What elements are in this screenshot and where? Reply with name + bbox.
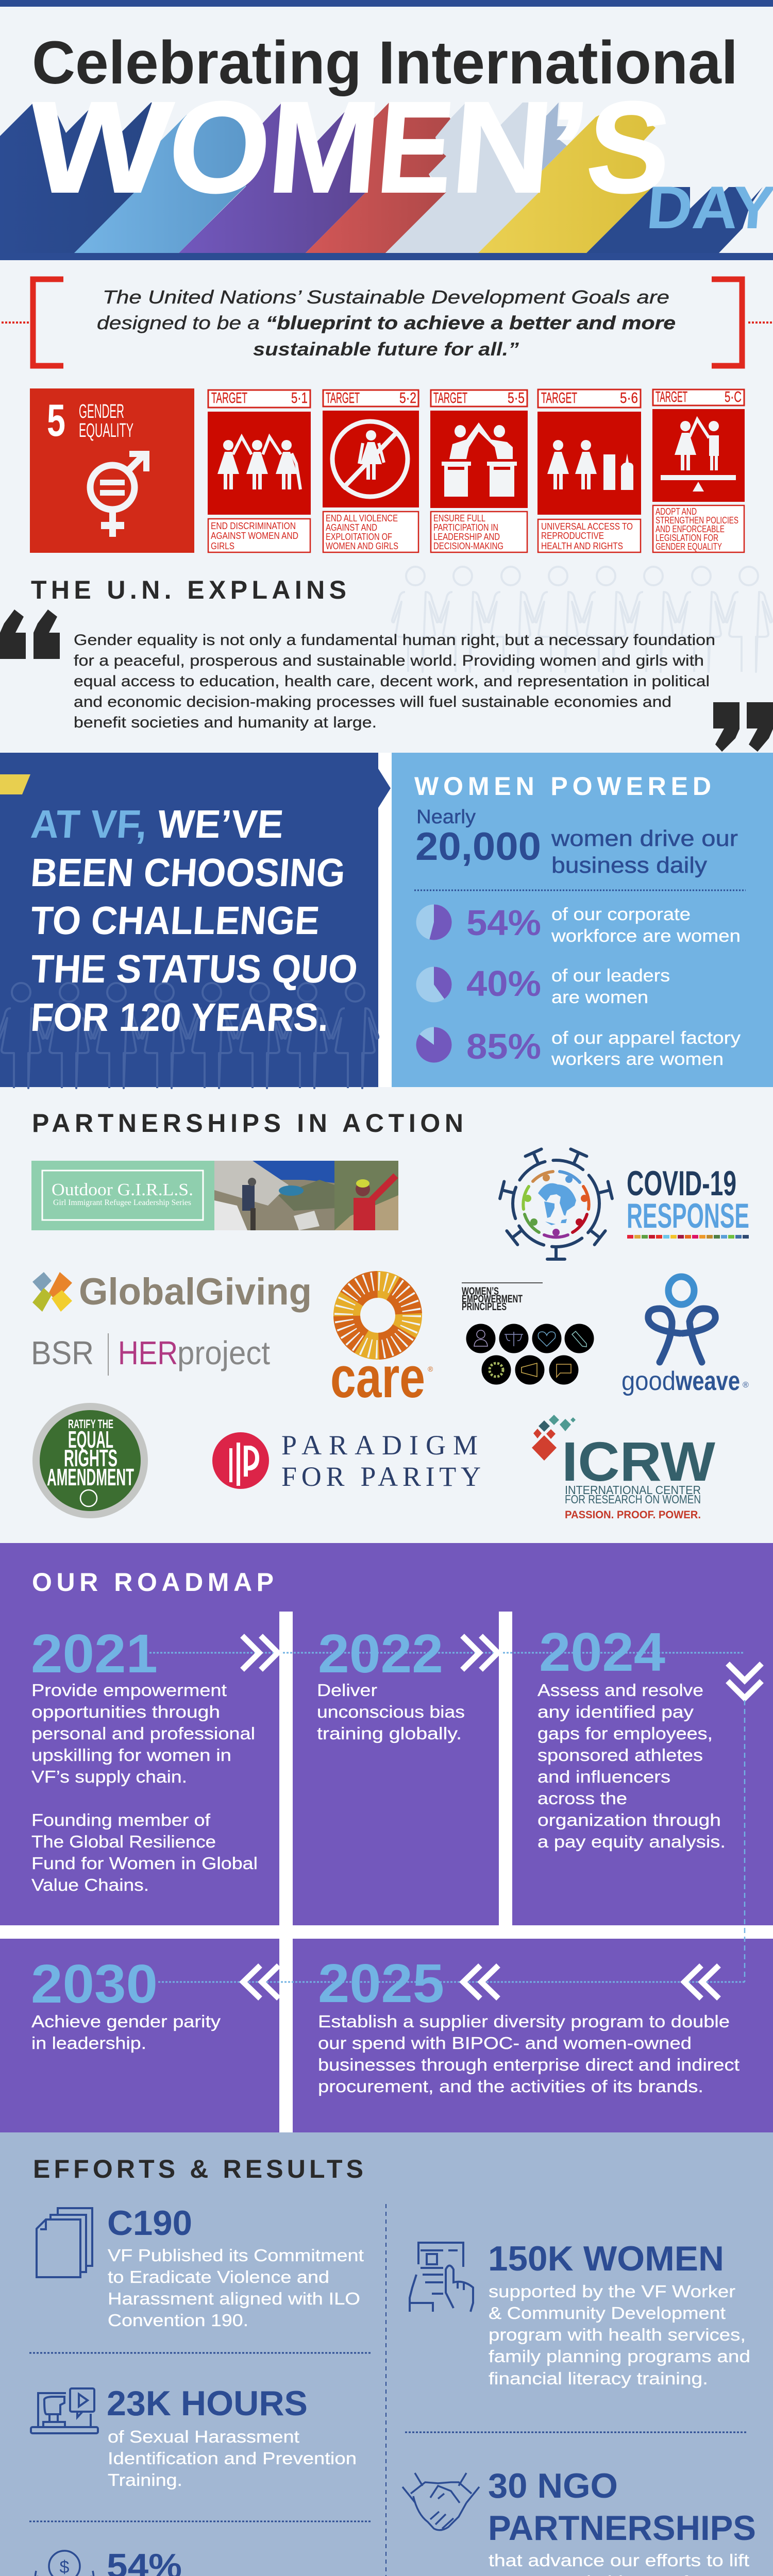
target 5.2 card: 5·2 bbox=[399, 390, 416, 406]
item: 150K women: 150K WOMEN bbox=[488, 2239, 724, 2278]
panel: women powered bbox=[392, 753, 773, 1087]
logo: ICRW: ICRW bbox=[562, 1430, 715, 1493]
goal number: 5 bbox=[47, 395, 65, 446]
item: 150K women: supported by the VF Worker bbox=[489, 2282, 735, 2301]
item: 150K women: program with health services, bbox=[489, 2325, 746, 2344]
icon: diamonds bbox=[532, 1415, 576, 1461]
target 5.1 card: 5·1 bbox=[291, 390, 308, 406]
2024 milestone: any identified pay bbox=[537, 1702, 694, 1721]
arrow: chevrons toward 2030 bbox=[243, 1965, 279, 1998]
icon: women at podiums bbox=[442, 422, 517, 497]
logo: Outdoor GIRLS banner: Outdoor G.I.R.L.S. bbox=[52, 1180, 193, 1199]
icon: hands holding coin bbox=[35, 2551, 94, 2576]
white gap behind statement panels bbox=[0, 753, 773, 1087]
SDG colour strip bbox=[627, 1235, 749, 1239]
logo: Paradigm for Parity bbox=[212, 1430, 481, 1492]
WOMEN'S wordmark: ’ bbox=[541, 74, 595, 220]
virus ring bbox=[500, 1149, 612, 1259]
stat: 40% leaders: of our leaders bbox=[551, 966, 670, 986]
panel: at VF statement: THE STATUS QUO bbox=[29, 947, 359, 991]
icon: documents bbox=[37, 2208, 92, 2277]
target 5.1 card: END DISCRIMINATION bbox=[211, 521, 296, 531]
target 5.5 card: PARTICIPATION IN bbox=[433, 522, 498, 533]
stat: 54% corporate workforce: workforce are women bbox=[551, 926, 741, 946]
2024 milestone bbox=[537, 1622, 726, 1851]
dotted timeline bbox=[149, 1652, 745, 1654]
target 5.6 card: HEALTH AND RIGHTS bbox=[541, 541, 623, 551]
target 5.5 card: DECISION-MAKING bbox=[433, 541, 503, 551]
2021 milestone: Fund for Women in Global bbox=[31, 1854, 258, 1873]
2022 milestone: Deliver bbox=[317, 1681, 377, 1700]
2021 milestone: The Global Resilience bbox=[31, 1832, 216, 1851]
icon: ring of hands bbox=[335, 1273, 420, 1358]
2030 milestone: in leadership. bbox=[31, 2033, 146, 2053]
target 5.1 card: GIRLS bbox=[211, 541, 234, 551]
target 5.c card: 5·C bbox=[725, 389, 742, 405]
20,000 women stat: women drive our bbox=[551, 826, 738, 851]
panel: roadmap upper row bbox=[0, 1543, 773, 1925]
stat: 54% corporate workforce: of our corporate bbox=[551, 905, 691, 924]
logo: ICRW: PASSION. PROOF. POWER. bbox=[565, 1509, 701, 1521]
paragraph bbox=[74, 632, 715, 731]
WOMEN'S wordmark: O bbox=[163, 74, 276, 220]
item: C190: C190 bbox=[107, 2204, 192, 2243]
item: 30 NGO partnerships bbox=[402, 2466, 756, 2576]
stat: 54% corporate workforce bbox=[416, 903, 741, 946]
2021 milestone: personal and professional bbox=[31, 1724, 255, 1743]
target 5.c card: ADOPT AND bbox=[656, 506, 697, 517]
target 5.2 card bbox=[323, 390, 419, 552]
heading: WOMEN POWERED bbox=[414, 772, 711, 801]
2025 milestone: our spend with BIPOC- and women-owned bbox=[318, 2033, 692, 2053]
target 5.2 card: EXPLOITATION OF bbox=[326, 532, 392, 542]
item: 30 NGO partnerships: 30 NGO bbox=[488, 2466, 618, 2505]
20,000 women stat: 20,000 bbox=[415, 825, 541, 869]
target 5.2 card: AGAINST AND bbox=[326, 522, 377, 533]
WOMEN'S wordmark: M bbox=[263, 74, 385, 220]
stat: 85% apparel factory workers: workers are women bbox=[551, 1049, 724, 1069]
target 5.5 card: TARGET bbox=[433, 390, 467, 406]
yellow tab bbox=[0, 774, 30, 794]
target 5.6 card: UNIVERSAL ACCESS TO bbox=[541, 521, 633, 532]
2024 milestone: and influencers bbox=[537, 1767, 670, 1786]
stat: 85% apparel factory workers: 85% bbox=[466, 1026, 541, 1066]
2030 milestone bbox=[31, 1954, 221, 2053]
left bracket bbox=[33, 279, 63, 366]
white column dividers bbox=[279, 1612, 293, 1925]
arrow: chevrons 2022 to 2024 bbox=[462, 1636, 498, 1670]
20,000 women stat bbox=[415, 806, 738, 878]
target 5.5 card: ENSURE FULL bbox=[433, 513, 485, 523]
logo: Ratify the Equal Rights Amendment badge: RATIFY THE bbox=[68, 1417, 113, 1431]
item: 23K hours: of Sexual Harassment bbox=[108, 2427, 299, 2446]
WOMEN'S wordmark: N bbox=[447, 74, 558, 220]
item: 23K hours bbox=[31, 2384, 357, 2489]
paragraph: and economic decision-making processes will fuel sustainable economies and bbox=[74, 693, 671, 710]
pie chart 85% bbox=[416, 1027, 451, 1062]
dashed and dotted timeline bbox=[744, 1700, 745, 1982]
item: 23K hours: Identification and Prevention bbox=[108, 2449, 357, 2468]
small NOW emblem bbox=[80, 1490, 97, 1506]
2025 milestone bbox=[318, 1953, 740, 2096]
stat: 40% leaders bbox=[416, 963, 670, 1007]
panel: efforts and results bbox=[0, 2132, 773, 2576]
DAY wordmark: DAY bbox=[644, 174, 773, 241]
logo: GoodWeave: good bbox=[621, 1366, 676, 1396]
2022 milestone: 2022 bbox=[318, 1623, 443, 1684]
UN quote callout: designed to be a “blueprint to achieve a better and more bbox=[97, 312, 676, 333]
paragraph: Gender equality is not only a fundamental human right, but a necessary foundation bbox=[74, 632, 715, 649]
title: Celebrating International bbox=[32, 29, 738, 97]
panel: at VF statement: BEEN CHOOSING bbox=[29, 851, 347, 895]
logo: Ratify the Equal Rights Amendment badge: EQUAL bbox=[68, 1426, 113, 1453]
target 5.c card: STRENGTHEN POLICIES bbox=[656, 515, 738, 526]
target 5.5 card: 5·5 bbox=[508, 390, 525, 406]
UN quote callout bbox=[2, 279, 773, 366]
item: C190: to Eradicate Violence and bbox=[108, 2267, 329, 2286]
logo: Outdoor GIRLS banner bbox=[31, 1161, 398, 1230]
logo: GoodWeave: weave bbox=[675, 1366, 740, 1396]
UN quote callout: sustainable future for all.” bbox=[253, 338, 519, 360]
long shadows of WOMEN'S bbox=[0, 103, 763, 253]
2021 milestone: opportunities through bbox=[31, 1702, 220, 1721]
icon: goodweave figure bbox=[648, 1277, 715, 1362]
logo: Women's Empowerment Principles: PRINCIPLES bbox=[462, 1301, 507, 1313]
paragraph: benefit societies and humanity at large. bbox=[74, 714, 377, 731]
20,000 women stat: Nearly bbox=[416, 806, 476, 828]
icon: training video bbox=[31, 2388, 98, 2433]
target 5.6 card: 5·6 bbox=[620, 390, 638, 406]
faint row of women outlines bbox=[0, 983, 378, 1088]
2024 milestone: Assess and resolve bbox=[537, 1681, 703, 1700]
arrow: chevrons 2021 to 2022 bbox=[242, 1636, 278, 1670]
item: C190 bbox=[37, 2204, 364, 2330]
white column divider bbox=[279, 1925, 293, 2132]
item: 150K women: family planning programs and bbox=[489, 2347, 750, 2366]
heading: EFFORTS & RESULTS bbox=[33, 2155, 363, 2183]
20,000 women stat: business daily bbox=[551, 853, 707, 878]
logo: Paradigm for Parity: FOR PARITY bbox=[281, 1461, 481, 1492]
target 5.2 card: WOMEN AND GIRLS bbox=[326, 541, 398, 551]
2021 milestone: Provide empowerment bbox=[31, 1681, 227, 1700]
WOMEN'S wordmark: S bbox=[582, 74, 676, 220]
logo: BSR HERproject: project bbox=[177, 1334, 270, 1371]
2022 milestone bbox=[317, 1623, 465, 1743]
target 5.5 card: LEADERSHIP AND bbox=[433, 532, 500, 542]
logo: CARE: care bbox=[330, 1345, 425, 1410]
icon: interlocked diamonds bbox=[32, 1272, 72, 1312]
logo: CARE: ® bbox=[428, 1365, 433, 1373]
pie chart 54% bbox=[416, 905, 452, 940]
paragraph: for a peaceful, prosperous and sustainable world. Providing women and girls with bbox=[74, 652, 704, 669]
2024 milestone: organization through bbox=[537, 1810, 721, 1829]
UN explains section bbox=[0, 567, 773, 752]
item: 150K women bbox=[410, 2239, 750, 2388]
target 5.c card: AND ENFORCEABLE bbox=[656, 524, 725, 534]
panel: at VF statement: FOR 120 YEARS. bbox=[29, 995, 330, 1040]
2025 milestone: businesses through enterprise direct and indirect bbox=[318, 2055, 740, 2074]
2030 milestone: Achieve gender parity bbox=[31, 2012, 221, 2031]
item: 54% grant funding bbox=[35, 2547, 367, 2576]
item: 30 NGO partnerships: that advance our efforts to lift bbox=[489, 2551, 749, 2570]
item: C190: Harassment aligned with ILO bbox=[108, 2289, 360, 2308]
icon: opening quote bbox=[0, 609, 60, 659]
2025 milestone: procurement, and the activities of its brands. bbox=[318, 2077, 703, 2096]
2030 milestone: 2030 bbox=[31, 1954, 158, 2014]
heading: PARTNERSHIPS IN ACTION bbox=[32, 1109, 463, 1138]
goal name: GENDER bbox=[79, 401, 124, 422]
2022 milestone: training globally. bbox=[317, 1724, 462, 1743]
logo: ICRW: INTERNATIONAL CENTER bbox=[565, 1483, 701, 1497]
quote text: The United Nations’ Sustainable Development Goals are bbox=[103, 286, 669, 308]
logo: ICRW: FOR RESEARCH ON WOMEN bbox=[565, 1493, 701, 1506]
top bar bbox=[0, 0, 773, 7]
logo: Ratify the Equal Rights Amendment badge bbox=[32, 1403, 148, 1518]
2021 milestone: Founding member of bbox=[31, 1810, 211, 1829]
target 5.c card bbox=[652, 389, 745, 552]
seven principle icons bbox=[466, 1324, 594, 1385]
2025 milestone: 2025 bbox=[318, 1953, 444, 2014]
target 5.c card: GENDER EQUALITY bbox=[656, 541, 722, 552]
item: 23K hours: 23K HOURS bbox=[107, 2384, 308, 2423]
2021 milestone: VF’s supply chain. bbox=[31, 1767, 187, 1786]
logo: Women's Empowerment Principles: EMPOWERMENT bbox=[462, 1293, 523, 1305]
stat: 85% apparel factory workers bbox=[416, 1026, 741, 1069]
target 5.c card: TARGET bbox=[656, 389, 687, 405]
2021 milestone: upskilling for women in bbox=[31, 1745, 231, 1765]
SDG 5 gender equality panel bbox=[30, 388, 194, 553]
heading: OUR ROADMAP bbox=[32, 1568, 274, 1597]
item: 30 NGO partnerships: PARTNERSHIPS bbox=[488, 2509, 756, 2548]
panel: at VF statement bbox=[0, 753, 391, 1088]
2025 milestone: Establish a supplier diversity program to double bbox=[318, 2012, 730, 2031]
panel: roadmap lower row bbox=[0, 1700, 773, 2132]
icon: closing quote bbox=[713, 702, 773, 752]
panel: at VF statement: TO CHALLENGE bbox=[29, 899, 321, 943]
stat: 40% leaders: 40% bbox=[466, 963, 541, 1004]
globe bbox=[538, 1183, 576, 1225]
item: C190: Convention 190. bbox=[108, 2311, 248, 2330]
dotted connectors bbox=[2, 321, 773, 324]
2024 milestone: 2024 bbox=[539, 1622, 665, 1683]
arrow: chevrons 2025 start bbox=[684, 1965, 719, 1998]
WOMEN'S wordmark: W bbox=[23, 74, 177, 220]
logo: GoodWeave bbox=[621, 1277, 749, 1396]
target 5.1 card bbox=[208, 390, 311, 552]
WOMEN'S wordmark: E bbox=[373, 74, 459, 220]
target 5.5 card bbox=[430, 390, 528, 552]
icon: IIP bars bbox=[229, 1443, 259, 1486]
2024 milestone: gaps for employees, bbox=[537, 1724, 713, 1743]
right bracket bbox=[712, 279, 742, 366]
SDG 5 gender equality panel: EQUALITY bbox=[79, 420, 133, 442]
icon: three women holding hands bbox=[217, 437, 300, 489]
logo: Women's Empowerment Principles bbox=[462, 1282, 594, 1385]
climber photo bbox=[334, 1161, 398, 1230]
partnerships section bbox=[31, 1109, 749, 1521]
stat: 85% apparel factory workers: of our apparel factory bbox=[551, 1028, 741, 1048]
logo: Outdoor GIRLS banner: Girl Immigrant Refugee Leadership Series bbox=[53, 1198, 191, 1207]
logo: CARE bbox=[330, 1273, 433, 1410]
logo: ICRW bbox=[532, 1415, 715, 1521]
target 5.2 card: TARGET bbox=[326, 390, 360, 406]
arrow: chevrons 2025 to 2030 area bbox=[463, 1965, 498, 1998]
2024 milestone: a pay equity analysis. bbox=[537, 1832, 726, 1851]
icon: balance of two women bbox=[661, 419, 736, 492]
stat: 54% corporate workforce: 54% bbox=[466, 903, 541, 943]
2024 milestone: sponsored athletes bbox=[537, 1745, 703, 1765]
paragraph: equal access to education, health care, decent work, and representation in political bbox=[74, 673, 710, 690]
statement text: AT VF, WE’VE bbox=[29, 802, 285, 846]
item: C190: VF Published its Commitment bbox=[108, 2246, 364, 2265]
2024 milestone: across the bbox=[537, 1789, 627, 1808]
icon: gender equality symbol bbox=[90, 451, 149, 537]
target 5.6 card: REPRODUCTIVE bbox=[541, 531, 604, 541]
2021 milestone bbox=[31, 1623, 258, 1894]
target 5.1 card: TARGET bbox=[211, 390, 247, 406]
icon: women, pill pack and condom bbox=[547, 440, 633, 490]
logo: BSR HERproject: HER bbox=[118, 1334, 178, 1371]
icon: no violence bbox=[332, 421, 408, 497]
logo: BSR HERproject bbox=[31, 1333, 270, 1376]
target 5.c card: LEGISLATION FOR bbox=[656, 533, 718, 543]
2022 milestone: unconscious bias bbox=[317, 1702, 465, 1721]
heading: THE U.N. EXPLAINS bbox=[31, 575, 346, 604]
logo: Ratify the Equal Rights Amendment badge: AMENDMENT bbox=[47, 1464, 134, 1490]
2021 milestone: Value Chains. bbox=[31, 1875, 149, 1894]
logo: Ratify the Equal Rights Amendment badge: RIGHTS bbox=[64, 1445, 117, 1471]
logo: Women's Empowerment Principles: WOMEN’S bbox=[462, 1285, 499, 1297]
white gap behind roadmap bbox=[0, 1543, 773, 2132]
item: 150K women: & Community Development bbox=[489, 2303, 726, 2323]
target 5.1 card: AGAINST WOMEN AND bbox=[211, 531, 298, 541]
stat: 40% leaders: are women bbox=[551, 988, 648, 1007]
arrow: chevrons pointing down bbox=[728, 1664, 762, 1698]
logo: GoodWeave: ® bbox=[743, 1381, 749, 1389]
pie chart 40% bbox=[416, 967, 452, 1003]
logo: GlobalGiving: GlobalGiving bbox=[79, 1271, 312, 1313]
coloured people ring bbox=[523, 1172, 589, 1237]
header bottom bar bbox=[0, 253, 773, 260]
logo: Paradigm for Parity: PARADIGM bbox=[281, 1430, 478, 1461]
item: 23K hours: Training. bbox=[108, 2470, 182, 2489]
icon: tablet with pointing hand bbox=[410, 2243, 473, 2312]
icon: handshake bbox=[402, 2473, 479, 2530]
faint row of women outlines bbox=[392, 567, 772, 672]
mountain photo bbox=[214, 1161, 334, 1230]
target 5.2 card: END ALL VIOLENCE bbox=[326, 513, 398, 523]
logo: COVID-19 Response bbox=[500, 1149, 749, 1259]
target 5.6 card: TARGET bbox=[541, 390, 577, 406]
item: 150K women: financial literacy training. bbox=[489, 2369, 708, 2388]
header bbox=[0, 0, 773, 260]
target 5.6 card bbox=[537, 389, 641, 552]
logo: BSR HERproject: BSR bbox=[31, 1334, 94, 1371]
2021 milestone: 2021 bbox=[31, 1623, 158, 1684]
